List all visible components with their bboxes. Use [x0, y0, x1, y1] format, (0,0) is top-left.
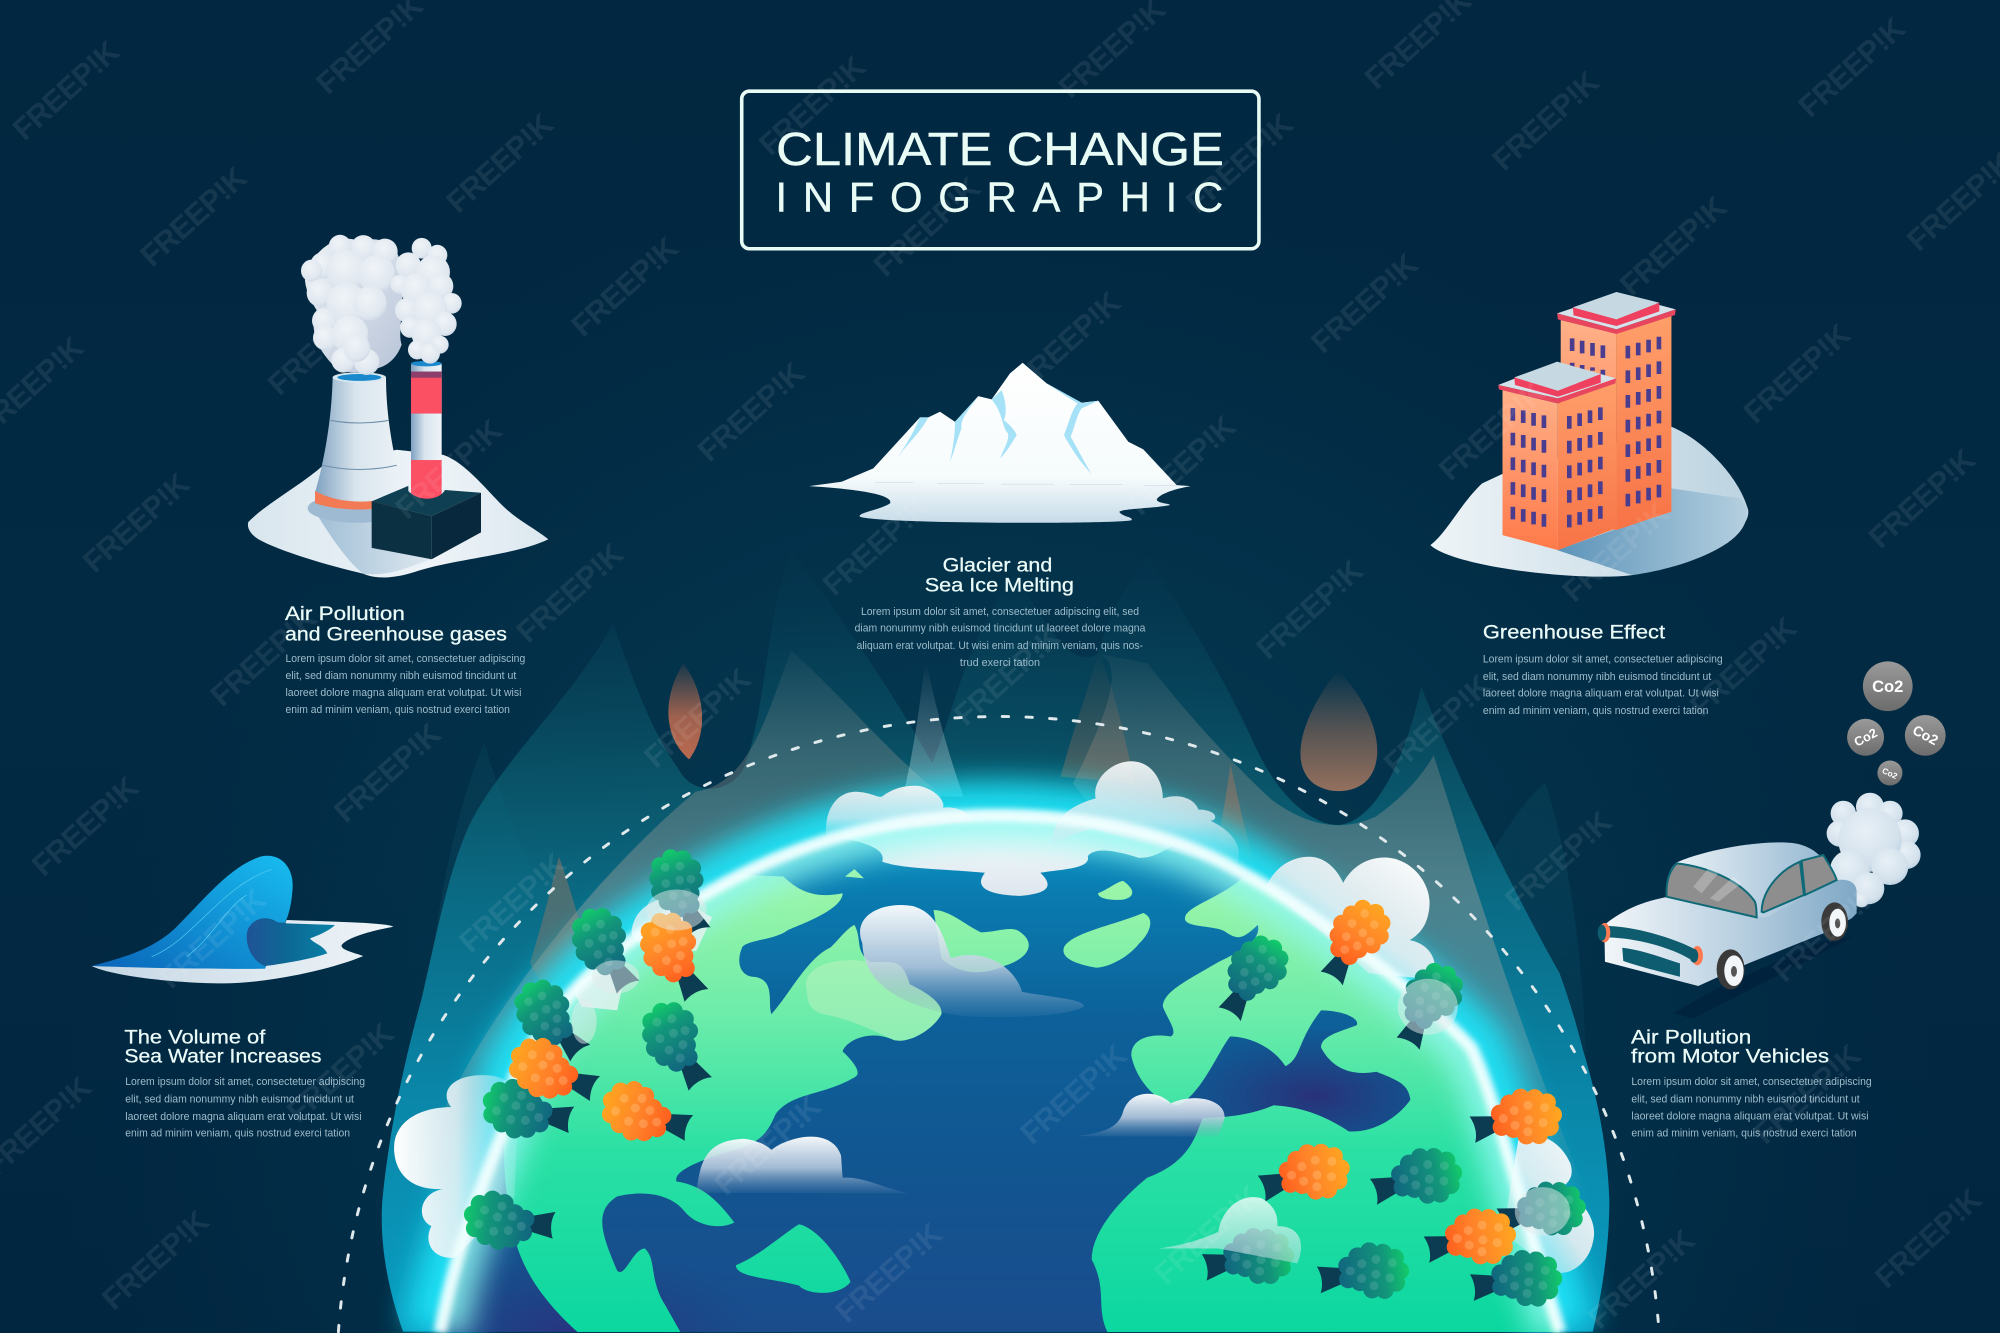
- watermarks: FREEP!K: [1737, 318, 1857, 430]
- watermarks: FREEP!K: [867, 171, 987, 283]
- text: the volume of sea water increases: Sea Water Increases: [124, 1045, 322, 1067]
- watermarks: FREEP!K: [565, 231, 685, 343]
- flames rising from the globe: [382, 550, 1609, 1332]
- building shadow: [1557, 488, 1747, 575]
- text: the volume of sea water increases: elit, sed diam nonummy nibh euismod tincidunt ut: [125, 1094, 354, 1106]
- atmosphere glow: [440, 815, 1560, 1332]
- car body: [1604, 880, 1857, 986]
- land and ice clipped to sphere: [396, 815, 1645, 1332]
- watermarks: FREEP!K: [691, 356, 811, 468]
- text: the volume of sea water increases: The Volume of: [124, 1026, 266, 1048]
- watermarks: FREEP!K: [753, 50, 872, 162]
- polar ice cap: [839, 817, 1175, 896]
- text: greenhouse effect: [1483, 621, 1723, 717]
- text: glacier and sea ice melting: Sea Ice Melting: [925, 575, 1074, 597]
- text: air pollution from motor vehicles: from Motor Vehicles: [1631, 1046, 1829, 1068]
- front wheel: [1717, 949, 1745, 989]
- short building: [1498, 362, 1616, 550]
- text: glacier and sea ice melting: diam nonummy nibh euismod tincidunt ut laoreet dolore magna: [855, 622, 1145, 634]
- watermarks: FREEP!K: [261, 289, 381, 402]
- watermarks: FREEP!K: [1614, 190, 1733, 303]
- cloud over lower trees: [1159, 1197, 1301, 1263]
- panel: glacier illustration: [809, 363, 1191, 523]
- text: glacier and sea ice melting: aliquam erat volutpat. Ut wisi enim ad minim veniam, quis nos-: [857, 640, 1143, 652]
- orange beam right: [1212, 763, 1254, 863]
- watermarks: FREEP!K: [1014, 1038, 1134, 1151]
- ground shadow: [310, 500, 433, 574]
- watermarks: FREEP!K: [1305, 247, 1425, 360]
- windshield glare: [1693, 868, 1742, 902]
- dashed orbit arc: [338, 717, 1659, 1332]
- smoke from chimney: [391, 238, 462, 364]
- bubble 3: Co2: [1910, 722, 1941, 748]
- watermarks: FREEP!K: [1432, 375, 1552, 487]
- globe: [394, 761, 1645, 1332]
- text: glacier and sea ice melting: [855, 554, 1145, 669]
- co2 bubbles: [1847, 661, 1946, 786]
- top left cloud: [826, 786, 973, 839]
- title line 2: INFOGRAPHIC: [776, 174, 1223, 221]
- translucent cloud over trees: [571, 890, 1570, 1235]
- watermarks: FREEP!K: [96, 1204, 215, 1317]
- text: glacier and sea ice melting: trud exerci tation: [960, 657, 1040, 669]
- lower right cloud: [1503, 1135, 1594, 1273]
- islands: [736, 869, 1150, 1293]
- watermarks: FREEP!K: [1747, 1038, 1867, 1151]
- ground: [248, 450, 548, 577]
- panel: greenhouse buildings illustration: [1430, 292, 1748, 577]
- smoke from cooling tower: [301, 235, 402, 375]
- factory building: [372, 486, 481, 559]
- light land patch: [806, 960, 942, 1041]
- text: air pollution from motor vehicles: Lorem ipsum dolor sit amet, consectetuer adipiscing: [1631, 1076, 1872, 1088]
- watermarks: FREEP!K: [948, 620, 1067, 732]
- watermarks: FREEP!K: [440, 107, 560, 220]
- big edge clouds: [394, 761, 1594, 1273]
- water base: [92, 920, 393, 983]
- faint outer flames: [421, 743, 1587, 1163]
- main teal flame body: [382, 550, 1609, 1332]
- watermarks: FREEP!K: [6, 34, 126, 147]
- exhaust smoke: [1827, 793, 1921, 907]
- panel: polluting car illustration: [1598, 793, 1921, 1018]
- text: greenhouse effect: Greenhouse Effect: [1483, 621, 1666, 643]
- windows tall building: [1572, 337, 1659, 506]
- text: air pollution from motor vehicles: laoreet dolore magna aliquam erat volutpat. Ut wisi: [1631, 1111, 1869, 1123]
- front stripe: [1608, 926, 1693, 960]
- white beam centre: [903, 657, 964, 797]
- top right cloud: [1052, 761, 1239, 862]
- text: greenhouse effect: laoreet dolore magna aliquam erat volutpat. Ut wisi: [1483, 687, 1719, 699]
- text: glacier and sea ice melting: Glacier and: [943, 554, 1052, 576]
- text: the volume of sea water increases: enim ad minim veniam, quis nostrud exerci tation: [125, 1128, 350, 1140]
- ice crevices: [892, 383, 1098, 474]
- watermarks: FREEP!K: [1862, 443, 1982, 555]
- watermarks: FREEP!K: [1122, 409, 1242, 522]
- cloud centre: [860, 905, 1084, 1017]
- watermarks: FREEP!K: [1767, 876, 1886, 989]
- watermarks: FREEP!K: [1684, 611, 1803, 723]
- watermarks: FREEP!K: [510, 537, 630, 649]
- watermarks: FREEP!K: [829, 1217, 949, 1329]
- watermarks: FREEP!K: [77, 467, 196, 579]
- text: glacier and sea ice melting: Lorem ipsum dolor sit amet, consectetuer adipiscing elit, sed: [861, 606, 1139, 618]
- bubble 4: Co2: [1881, 765, 1899, 781]
- tall building: [1557, 292, 1676, 530]
- right continent: [1092, 878, 1560, 1332]
- wave lines: [152, 869, 272, 957]
- watermarks: FREEP!K: [1582, 1223, 1701, 1333]
- text: air pollution from motor vehicles: enim ad minim veniam, quis nostrud exerci tation: [1631, 1127, 1857, 1139]
- orange beam centre: [1061, 653, 1135, 783]
- watermarks: FREEP!K: [389, 413, 509, 526]
- watermarks: FREEP!K: [328, 717, 447, 829]
- watermarks: FREEP!K: [1180, 107, 1300, 220]
- forests of trees on land: [461, 841, 1591, 1315]
- watermarks: FREEP!K: [1499, 805, 1618, 917]
- watermarks: FREEP!K: [153, 883, 273, 995]
- title line 1: CLIMATE CHANGE: [776, 123, 1224, 175]
- grille: [1622, 948, 1680, 977]
- orange beam left: [530, 857, 592, 1013]
- text: the volume of sea water increases: laoreet dolore magna aliquam erat volutpat. Ut wisi: [125, 1111, 362, 1123]
- text: greenhouse effect: enim ad minim veniam, quis nostrud exerci tation: [1483, 705, 1708, 717]
- side windows: [1762, 855, 1837, 912]
- navy sea patches: [1197, 1040, 1410, 1132]
- title box: [742, 91, 1259, 249]
- text: greenhouse effect: Lorem ipsum dolor sit amet, consectetuer adipiscing: [1483, 654, 1723, 666]
- watermarks: FREEP!K: [1378, 668, 1497, 781]
- watermarks: FREEP!K: [638, 662, 757, 774]
- watermarks: FREEP!K: [1486, 65, 1606, 177]
- chimney: [405, 361, 447, 504]
- roof: [1667, 842, 1837, 917]
- headlights: [1598, 923, 1703, 965]
- watermarks: FREEP!K: [453, 847, 572, 959]
- right cloud: [1266, 857, 1435, 980]
- orange trees: [499, 889, 1567, 1277]
- text: air pollution from motor vehicles: [1631, 1026, 1872, 1139]
- bright rim band: [440, 815, 1560, 1332]
- iceberg: [809, 363, 1191, 523]
- text: the volume of sea water increases: Lorem ipsum dolor sit amet, consectetuer adipiscing: [125, 1076, 365, 1088]
- watermarks: FREEP!K: [281, 1017, 400, 1129]
- watermarks: FREEP!K: [1792, 11, 1912, 124]
- inner rim glow: [440, 815, 1560, 1332]
- text: air pollution and greenhouse gases: Air Pollution: [285, 603, 405, 625]
- grey beam left: [410, 650, 957, 1197]
- cloud lower: [696, 1137, 908, 1193]
- watermarks: FREEP!K: [1148, 1179, 1268, 1291]
- watermarks: FREEP!K: [1250, 554, 1370, 666]
- cooling tower: [308, 372, 406, 523]
- windshield: [1667, 863, 1757, 917]
- text: air pollution and greenhouse gases: and Greenhouse gases: [285, 623, 507, 645]
- watermarks: FREEP!K: [1869, 1182, 1988, 1295]
- green trees: [461, 841, 1591, 1315]
- watermarks: FREEP!K: [1556, 496, 1676, 609]
- drop left: [668, 663, 702, 759]
- watermarks: FREEP!K: [204, 601, 324, 713]
- grey beam right: [1073, 653, 1587, 1197]
- watermarks: FREEP!K: [708, 1089, 828, 1202]
- watermarks: FREEP!K: [816, 490, 936, 602]
- wave crest: [92, 856, 293, 969]
- text: the volume of sea water increases: [124, 1026, 365, 1140]
- text: air pollution and greenhouse gases: enim ad minim veniam, quis nostrud exerci tation: [285, 704, 510, 716]
- left cloud: [394, 1075, 518, 1258]
- wave curl: [247, 918, 335, 966]
- watermarks: FREEP!K: [1008, 286, 1127, 398]
- panel: rising sea wave illustration: [92, 856, 393, 983]
- windows short building: [1513, 407, 1600, 527]
- drop right: [1300, 670, 1377, 791]
- left continent: [504, 873, 942, 1332]
- mid clouds: [696, 905, 1225, 1193]
- bubble 1: Co2: [1872, 677, 1903, 696]
- text: air pollution and greenhouse gases: laoreet dolore magna aliquam erat volutpat. Ut wisi: [285, 687, 521, 699]
- small left clouds: [574, 897, 712, 1010]
- text: air pollution and greenhouse gases: [285, 603, 525, 716]
- ocean: [440, 815, 1560, 1332]
- bubble 2: Co2: [1851, 725, 1880, 750]
- rear wheel: [1821, 902, 1848, 941]
- text: air pollution and greenhouse gases: elit, sed diam nonummy nibh euismod tincidunt ut: [285, 670, 516, 682]
- waterline: [875, 483, 1177, 485]
- watermarks: FREEP!K: [26, 770, 145, 883]
- watermarks: FREEP!K: [134, 161, 254, 273]
- text: air pollution from motor vehicles: Air Pollution: [1631, 1026, 1751, 1048]
- text: air pollution from motor vehicles: elit, sed diam nonummy nibh euismod tincidunt ut: [1631, 1093, 1860, 1105]
- cloud right: [1074, 1094, 1225, 1137]
- car shadow: [1673, 937, 1853, 1018]
- ground: [1430, 427, 1748, 577]
- panel: air pollution power plant illustration: [248, 235, 548, 577]
- text: greenhouse effect: elit, sed diam nonummy nibh euismod tincidunt ut: [1483, 671, 1711, 683]
- text: air pollution and greenhouse gases: Lorem ipsum dolor sit amet, consectetuer adipiscing: [285, 653, 525, 665]
